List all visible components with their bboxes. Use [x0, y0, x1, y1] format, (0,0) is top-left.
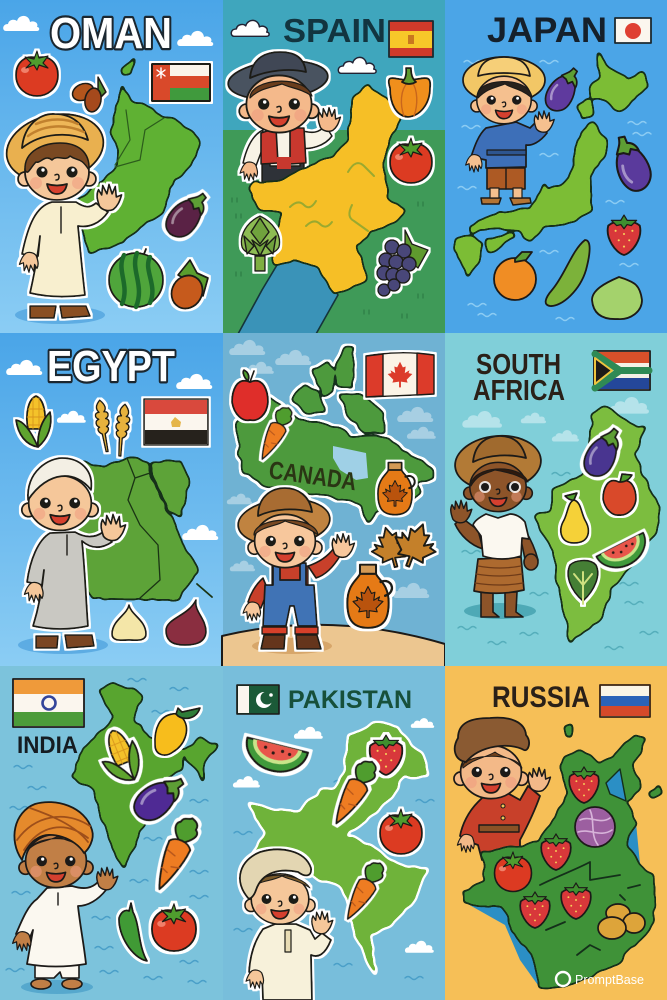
panel: India [0, 666, 223, 1000]
title: Japan: JAPAN [487, 11, 607, 50]
icon: cabbage [575, 807, 615, 847]
icon: watermelon slice [241, 738, 308, 778]
panel: Russia [445, 666, 667, 1000]
map of India [73, 683, 218, 868]
icon: strawberry [541, 834, 571, 870]
grass marks [232, 198, 423, 318]
flag: India [13, 679, 84, 727]
clouds [3, 16, 213, 46]
map of South Africa [536, 406, 660, 643]
icon: watermelon [109, 249, 163, 307]
icon: corn [16, 396, 51, 447]
panel: Egypt [0, 333, 223, 667]
icon: dates [70, 77, 106, 113]
shadow [21, 980, 93, 994]
flag: Russia [600, 685, 650, 717]
panel: Oman [0, 0, 223, 334]
child: Canada [236, 488, 354, 649]
icon: onion [112, 605, 146, 640]
watermark: PromptBase: PromptBase [575, 973, 644, 987]
icon: potatoes [598, 904, 645, 939]
flag: Canada [366, 353, 434, 397]
clouds [231, 20, 376, 73]
icon: lettuce [592, 277, 642, 319]
waves [458, 60, 651, 320]
child: India [13, 802, 118, 989]
icon: wheat [94, 399, 132, 457]
title: South Africa: SOUTH [476, 349, 561, 381]
icon: tomato [380, 809, 422, 854]
child: Japan [463, 57, 554, 205]
flag: Spain [389, 21, 433, 57]
map of Spain [250, 85, 405, 293]
shadow [15, 306, 105, 324]
icon: syrup bottle [378, 462, 415, 515]
child: Oman [0, 106, 122, 318]
icon: strawberry [569, 767, 599, 803]
panel: Canada [222, 333, 445, 667]
sea [238, 260, 338, 334]
icon: spinach [568, 560, 598, 604]
icon: tomato [152, 904, 196, 951]
child: South Africa [451, 432, 543, 617]
icon: tomato [495, 852, 531, 891]
icon: strawberry [561, 883, 591, 919]
icon: carrot [339, 858, 388, 924]
flag: Oman [152, 64, 210, 101]
title: South Africa [473, 349, 565, 407]
icon: eggplant [540, 62, 586, 116]
map of Canada [237, 346, 436, 523]
title: Oman: OMAN [50, 9, 172, 58]
clouds [227, 340, 436, 598]
title: India: INDIA [17, 732, 78, 759]
shadow [464, 603, 536, 619]
map of Oman [78, 58, 200, 253]
label: Canada: CANADA [267, 456, 358, 496]
clouds [6, 360, 218, 540]
icon: carrot [149, 813, 203, 894]
shadow [18, 636, 108, 654]
map of Japan [455, 52, 650, 275]
icon: chili [119, 903, 147, 961]
title: Pakistan: PAKISTAN [288, 686, 412, 714]
sand [222, 625, 445, 667]
icon: carrot [254, 404, 296, 463]
icon: eggplant [606, 131, 656, 195]
panel: Spain [223, 0, 445, 334]
clouds [462, 397, 649, 442]
icon: strawberry [608, 215, 640, 255]
icon: grapes [377, 230, 428, 296]
icon: strawberry [520, 892, 550, 928]
map of Egypt [70, 458, 212, 600]
icon: eggplant [579, 423, 628, 482]
flag: South Africa [594, 351, 650, 390]
icon: artichoke [241, 216, 280, 271]
icon: cucumber [546, 240, 590, 306]
title: Spain: SPAIN [283, 12, 386, 49]
icon: carrot [327, 756, 381, 829]
icon: orange [494, 252, 536, 300]
flag: Japan [615, 18, 651, 43]
title: Egypt: EGYPT [47, 342, 175, 391]
icon: mango [155, 708, 200, 755]
panel: Japan [445, 0, 667, 334]
icon: tomato [390, 138, 432, 183]
waves [6, 678, 208, 984]
icon: pepper [389, 68, 430, 117]
map of Russia [463, 723, 661, 988]
child: Egypt [22, 458, 126, 648]
flag: Egypt [144, 399, 208, 445]
title: South Africa: AFRICA [473, 375, 565, 407]
flag: Pakistan [237, 685, 279, 714]
icon: corn [93, 725, 147, 788]
icon: pear [561, 493, 588, 543]
icon: watermelon slice [596, 533, 653, 576]
icon: strawberry [370, 735, 402, 775]
child: Pakistan [240, 849, 333, 1000]
title: Russia: RUSSIA [492, 681, 590, 714]
shadow [252, 638, 332, 654]
icon: eggplant [128, 768, 192, 827]
icon: syrup bottle [347, 565, 392, 628]
icon: apple [232, 370, 268, 420]
panel: Pakistan [223, 666, 445, 1000]
icon: eggplant [160, 185, 215, 243]
map of Pakistan [247, 723, 428, 976]
panel: South Africa [445, 333, 667, 667]
icon: fruit [166, 260, 208, 314]
child: Spain [227, 52, 340, 190]
clouds [233, 718, 434, 953]
icon: red onion [166, 600, 206, 645]
Hudson Bay [333, 446, 368, 480]
waves [234, 780, 434, 980]
icon: tomato [16, 51, 58, 96]
waves [458, 472, 658, 650]
child: Russia [454, 718, 550, 860]
icon: apple [603, 474, 636, 515]
icon: maple leaves [367, 517, 443, 573]
